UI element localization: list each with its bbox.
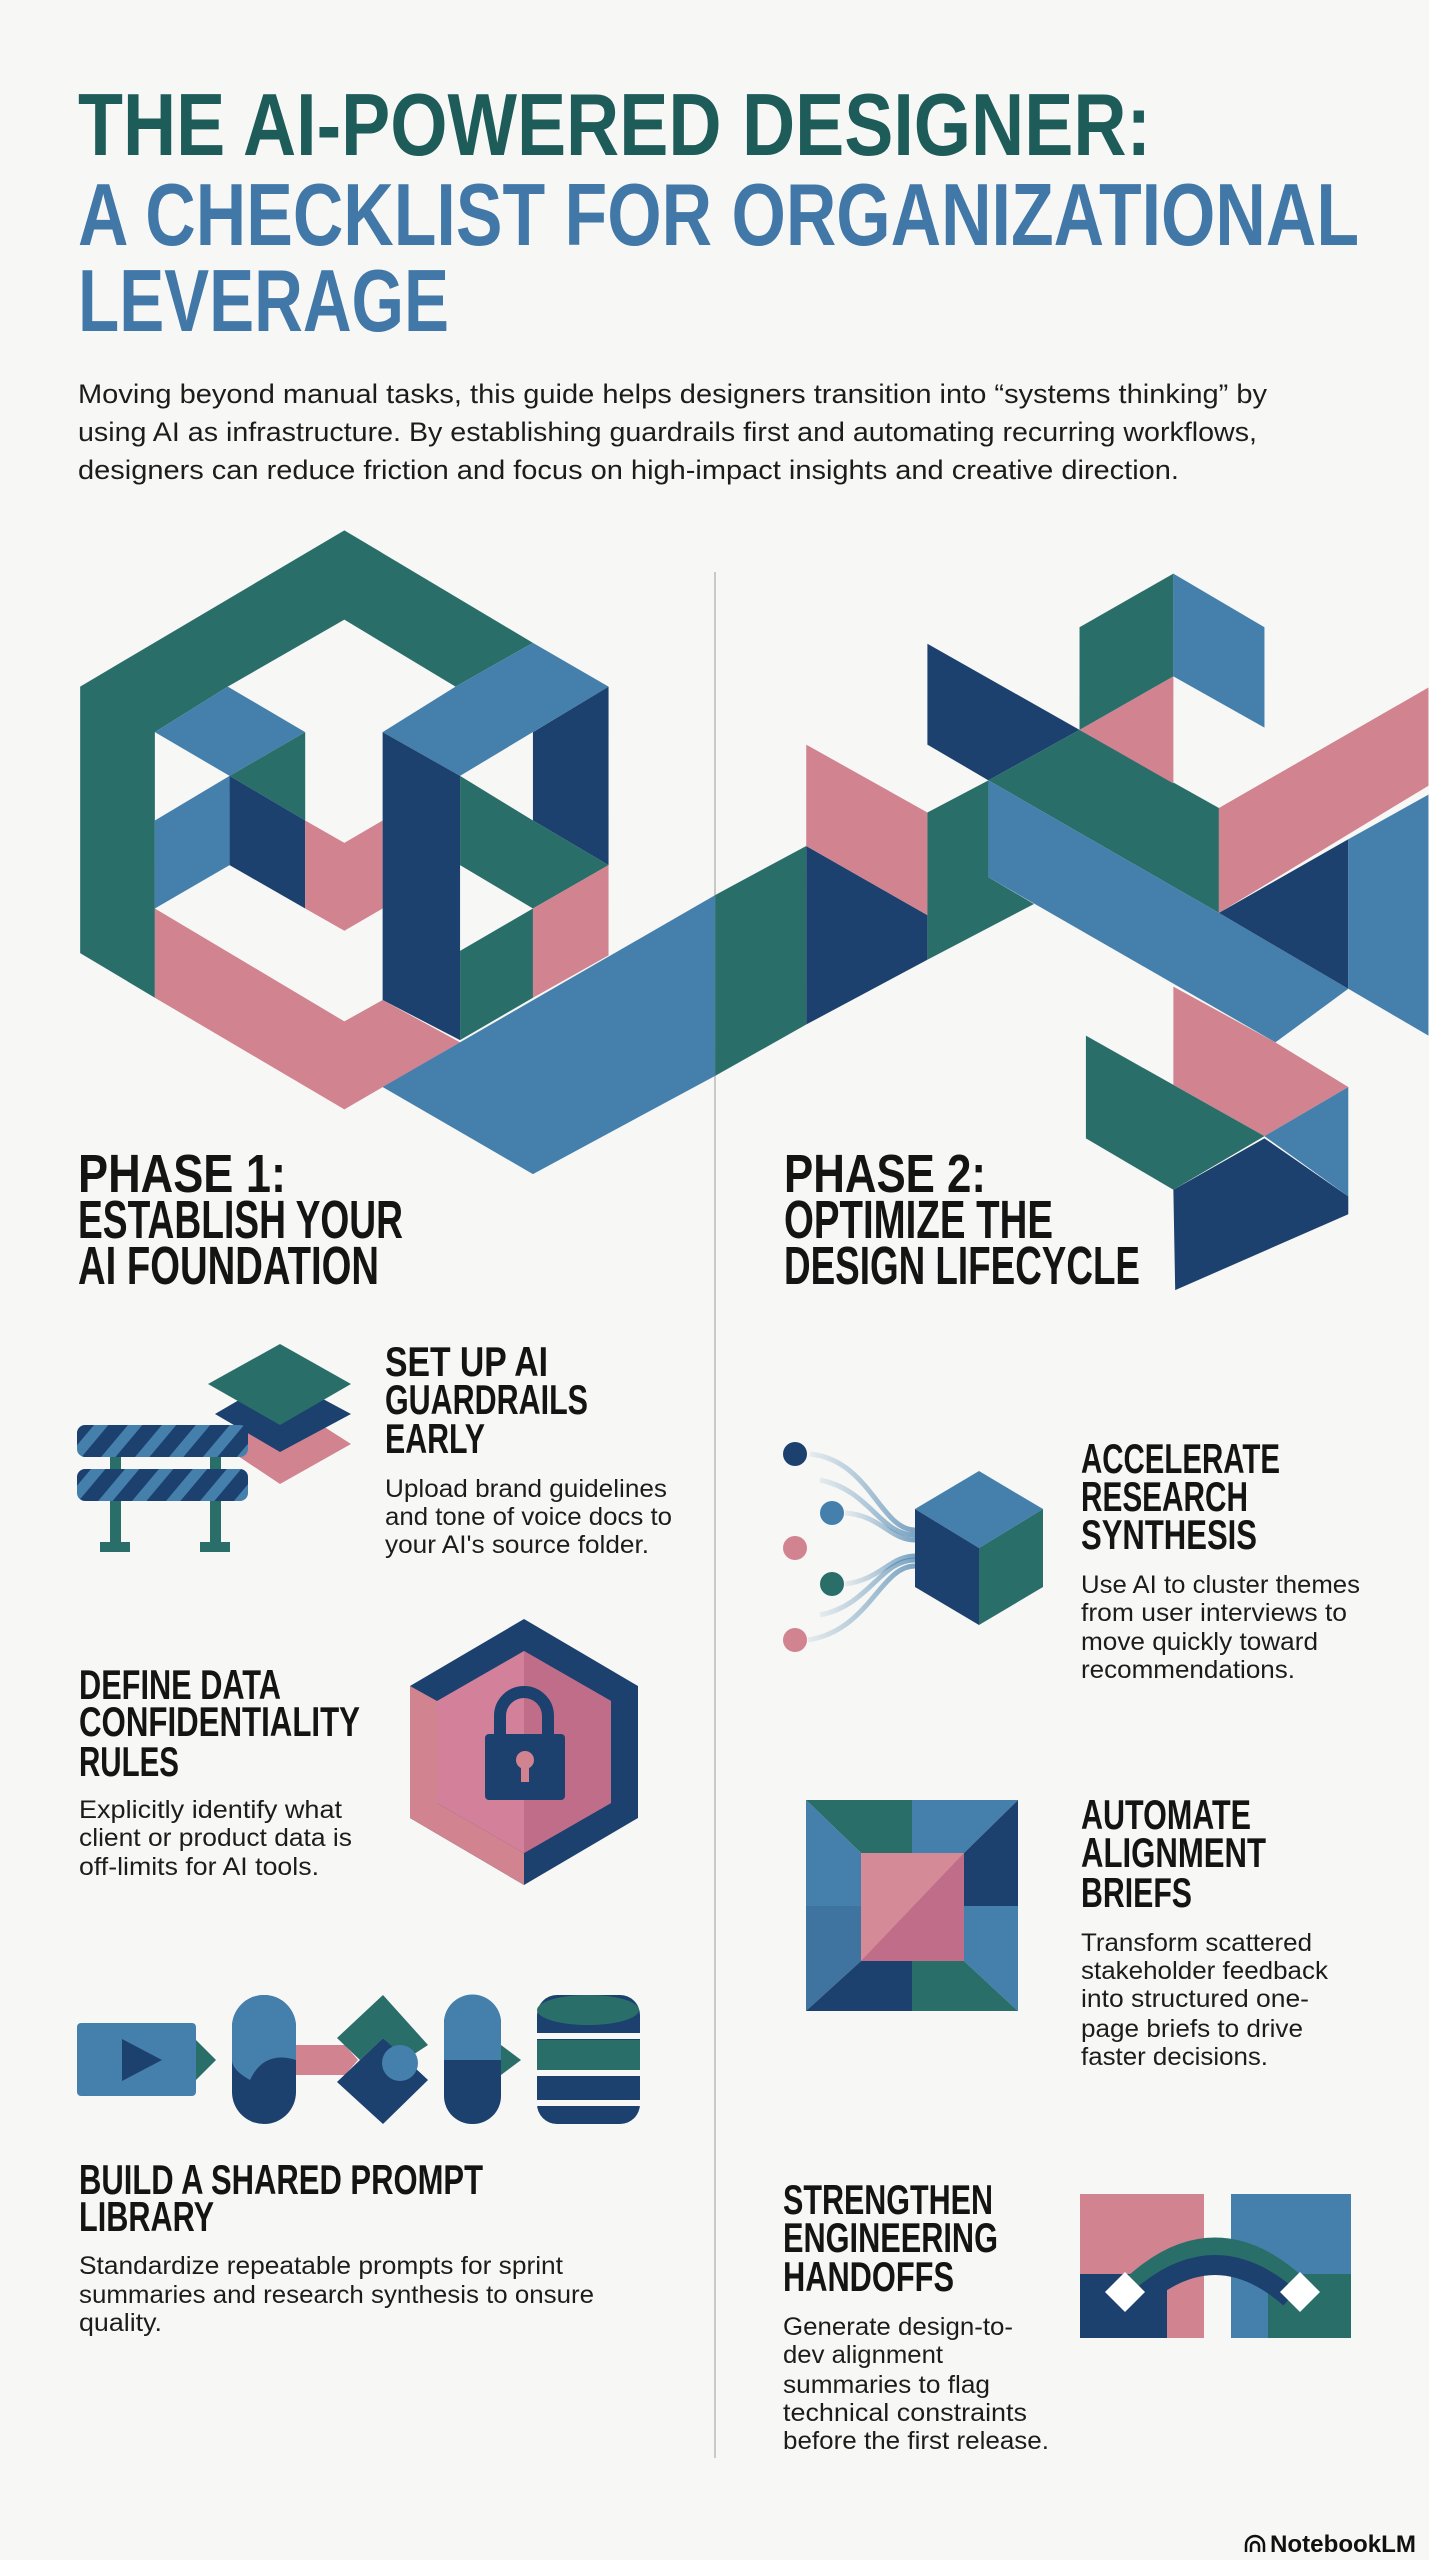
item: accelerate research synthesis: move quickly toward <box>1081 1628 1318 1656</box>
item: define data confidentiality rules <box>79 1661 360 1881</box>
item: accelerate research synthesis: RESEARCH <box>1081 1473 1248 1520</box>
item: accelerate research synthesis: from user interviews to <box>1081 1599 1347 1627</box>
item: set up AI guardrails <box>385 1338 672 1559</box>
heading: phase 1: PHASE 1: <box>78 1144 286 1204</box>
item: define data confidentiality rules: CONFIDENTIALITY <box>79 1698 360 1745</box>
item: strengthen engineering handoffs: HANDOFFS <box>783 2253 954 2300</box>
item: build a shared prompt library: Standardize repeatable prompts for sprint <box>79 2252 563 2280</box>
item: accelerate research synthesis <box>1081 1435 1360 1684</box>
item: define data confidentiality rules: off-limits for AI tools. <box>79 1853 319 1881</box>
icon row: prompt library flow <box>77 1995 640 2124</box>
item: build a shared prompt library <box>79 2156 594 2337</box>
item: set up AI guardrails: your AI's source folder. <box>385 1531 649 1559</box>
item: accelerate research synthesis: recommendations. <box>1081 1656 1295 1684</box>
item: build a shared prompt library: summaries and research synthesis to onsure <box>79 2281 594 2309</box>
icon: barrier with layers <box>77 1344 351 1552</box>
heading: phase 2: DESIGN LIFECYCLE <box>784 1236 1140 1296</box>
item: define data confidentiality rules: RULES <box>79 1738 179 1785</box>
item: build a shared prompt library: quality. <box>79 2309 162 2337</box>
item: accelerate research synthesis: ACCELERATE <box>1081 1435 1280 1482</box>
item: strengthen engineering handoffs: Generate design-to- <box>783 2313 1013 2341</box>
item: strengthen engineering handoffs: technical constraints <box>783 2399 1027 2427</box>
item: automate alignment briefs: AUTOMATE <box>1081 1791 1251 1838</box>
title <box>78 75 1359 350</box>
item: strengthen engineering handoffs: dev alignment <box>783 2341 943 2369</box>
intro paragraph: Moving beyond manual tasks, this guide helps designers transition into “systems thinking” by <box>78 379 1268 409</box>
item: strengthen engineering handoffs <box>783 2176 1049 2455</box>
item: set up AI guardrails: SET UP AI <box>385 1338 548 1385</box>
icon: bridge handoff <box>1080 2194 1351 2338</box>
item: set up AI guardrails: Upload brand guidelines <box>385 1475 667 1503</box>
heading: phase 2 <box>784 1144 1140 1296</box>
item: automate alignment briefs: faster decisions. <box>1081 2043 1268 2071</box>
item: automate alignment briefs: stakeholder feedback <box>1081 1957 1329 1985</box>
item: strengthen engineering handoffs: before the first release. <box>783 2427 1049 2455</box>
item: strengthen engineering handoffs: STRENGTHEN <box>783 2176 993 2223</box>
item: automate alignment briefs: ALIGNMENT <box>1081 1829 1266 1876</box>
intro paragraph: designers can reduce friction and focus on high-impact insights and creative direction. <box>78 455 1179 485</box>
heading: phase 1: AI FOUNDATION <box>78 1236 379 1296</box>
heading: phase 2: PHASE 2: <box>784 1144 986 1204</box>
heading: phase 1: ESTABLISH YOUR <box>78 1190 403 1250</box>
logo: NotebookLM: NotebookLM <box>1270 2531 1416 2558</box>
intro paragraph <box>78 379 1268 485</box>
item: automate alignment briefs: BRIEFS <box>1081 1869 1192 1916</box>
icon: alignment brief square <box>806 1800 1018 2011</box>
heading: phase 2: OPTIMIZE THE <box>784 1190 1053 1250</box>
item: accelerate research synthesis: SYNTHESIS <box>1081 1511 1257 1558</box>
intro paragraph: using AI as infrastructure. By establishing guardrails first and automating recurring workflows, <box>78 417 1257 447</box>
icon: research synthesis fan into cube <box>783 1442 1043 1652</box>
heading: phase 1 <box>78 1144 403 1296</box>
item: strengthen engineering handoffs: ENGINEERING <box>783 2214 998 2261</box>
item: automate alignment briefs: into structured one- <box>1081 1985 1309 2013</box>
icon: hexagon lock <box>410 1619 638 1885</box>
item: set up AI guardrails: and tone of voice docs to <box>385 1503 672 1531</box>
item: define data confidentiality rules: Explicitly identify what <box>79 1796 342 1824</box>
item: automate alignment briefs: Transform scattered <box>1081 1929 1312 1957</box>
item: define data confidentiality rules: DEFINE DATA <box>79 1661 281 1708</box>
item: set up AI guardrails: GUARDRAILS <box>385 1376 588 1423</box>
item: build a shared prompt library: BUILD A SHARED PROMPT <box>79 2156 483 2203</box>
hero illustration: interlocking geometric bands <box>80 530 1428 1290</box>
item: build a shared prompt library: LIBRARY <box>79 2193 214 2240</box>
title: LEVERAGE <box>78 251 449 350</box>
item: accelerate research synthesis: Use AI to cluster themes <box>1081 1571 1360 1599</box>
item: define data confidentiality rules: client or product data is <box>79 1824 352 1852</box>
item: automate alignment briefs <box>1081 1791 1329 2071</box>
item: automate alignment briefs: page briefs to drive <box>1081 2015 1303 2043</box>
title: THE AI-POWERED DESIGNER: <box>78 75 1151 174</box>
item: strengthen engineering handoffs: summaries to flag <box>783 2371 990 2399</box>
item: set up AI guardrails: EARLY <box>385 1415 485 1462</box>
